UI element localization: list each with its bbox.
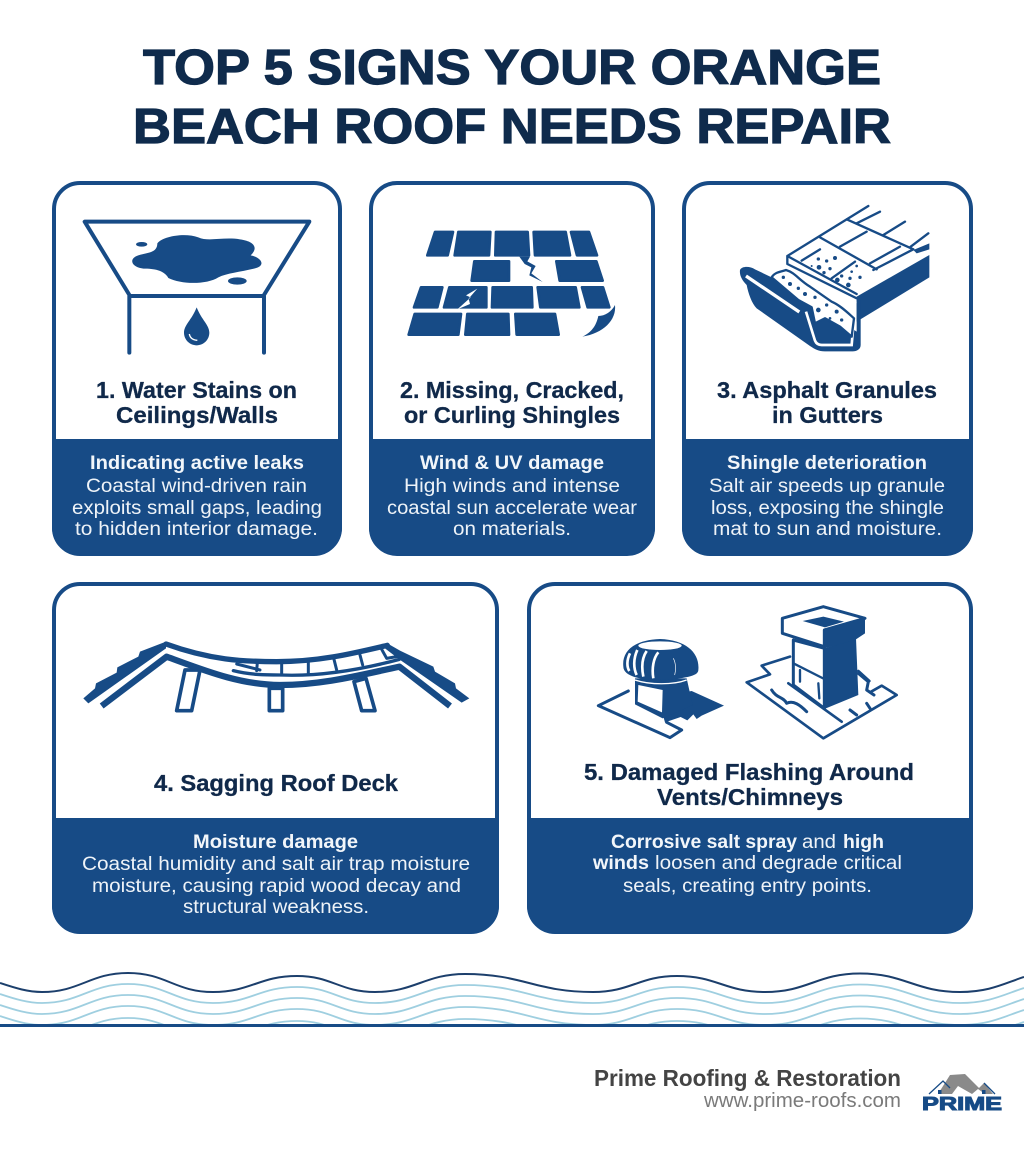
text block: card 3: Salt air speeds up granule [709, 476, 945, 497]
text block: card 5: loosen and degrade critical [655, 853, 902, 874]
text block: card 1: Coastal wind-driven rain [86, 476, 307, 497]
heading: card 2: or Curling Shingles [404, 402, 620, 428]
text block: card 2: Wind & UV damage [420, 453, 604, 474]
heading: card 2: 2. Missing, Cracked, [400, 377, 624, 403]
text block: card 3 [709, 453, 945, 540]
text block: card 5: seals, creating entry points. [623, 876, 872, 897]
text block: card 3: loss, exposing the shingle [711, 498, 944, 519]
heading: card 1: Ceilings/Walls [116, 402, 278, 428]
heading: card 5 [584, 759, 914, 810]
icon: missing and cracked shingles [409, 232, 615, 337]
text block: card 1 [72, 453, 322, 540]
title: BEACH ROOF NEEDS REPAIR [133, 100, 891, 154]
icon: chimney [747, 607, 897, 738]
panel: granules [682, 183, 973, 555]
footer: company name and website: www.prime-roofs.com [703, 1090, 901, 1112]
heading: card 2 [400, 377, 624, 428]
heading: card 5: 5. Damaged Flashing Around [584, 759, 914, 785]
heading: card 1: 1. Water Stains on [96, 377, 297, 403]
icon: sagging roof [83, 642, 469, 711]
heading: card 4: 4. Sagging Roof Deck [154, 770, 398, 796]
panel: flashing [527, 584, 973, 933]
text block: card 4 [82, 832, 470, 918]
title: TOP 5 SIGNS YOUR ORANGE [143, 41, 881, 95]
heading: card 1 [96, 377, 297, 428]
text block: card 2 [387, 453, 638, 540]
text block: card 3: Shingle deterioration [727, 453, 927, 474]
text block: card 4: Moisture damage [193, 832, 358, 853]
heading: card 3 [717, 377, 937, 428]
text block: card 2: High winds and intense [404, 476, 620, 497]
text block: card 4: Coastal humidity and salt air trap moisture [82, 854, 470, 875]
icon: ceiling water stain and drop [85, 222, 309, 353]
icon: PRIME logo: PRIME [922, 1094, 1002, 1114]
heading: card 5: Vents/Chimneys [657, 784, 843, 810]
icon: PRIME logo [922, 1074, 1002, 1114]
panel: water stains [52, 183, 342, 555]
heading: card 3: in Gutters [772, 402, 883, 428]
text block: card 5: and [802, 832, 836, 853]
icon: vent and chimney flashing [598, 607, 897, 738]
footer: company name and website: Prime Roofing & Restoration [594, 1065, 901, 1091]
decorative waves [0, 972, 1024, 1027]
text block: card 3: mat to sun and moisture. [713, 519, 942, 540]
panel: shingles [369, 183, 655, 555]
text block: card 1: exploits small gaps, leading [72, 498, 322, 519]
text block: card 5: Corrosive salt spray [611, 832, 797, 853]
text block: card 5: winds [592, 853, 649, 874]
icon: gutter with granules [740, 206, 929, 351]
text block: card 2: coastal sun accelerate wear [387, 498, 638, 519]
text block: card 2: on materials. [453, 519, 571, 540]
text block: card 1: to hidden interior damage. [75, 519, 318, 540]
panel: sagging deck [52, 584, 499, 933]
text block: card 4: moisture, causing rapid wood decay and [92, 876, 461, 897]
footer: company name and website [594, 1065, 901, 1112]
text block: card 5: high [843, 832, 884, 853]
title [133, 41, 891, 154]
text block: card 1: Indicating active leaks [90, 453, 304, 474]
heading: card 3: 3. Asphalt Granules [717, 377, 937, 403]
text block: card 5 [592, 832, 902, 897]
text block: card 4: structural weakness. [183, 897, 369, 918]
icon: roof vent [598, 639, 724, 738]
